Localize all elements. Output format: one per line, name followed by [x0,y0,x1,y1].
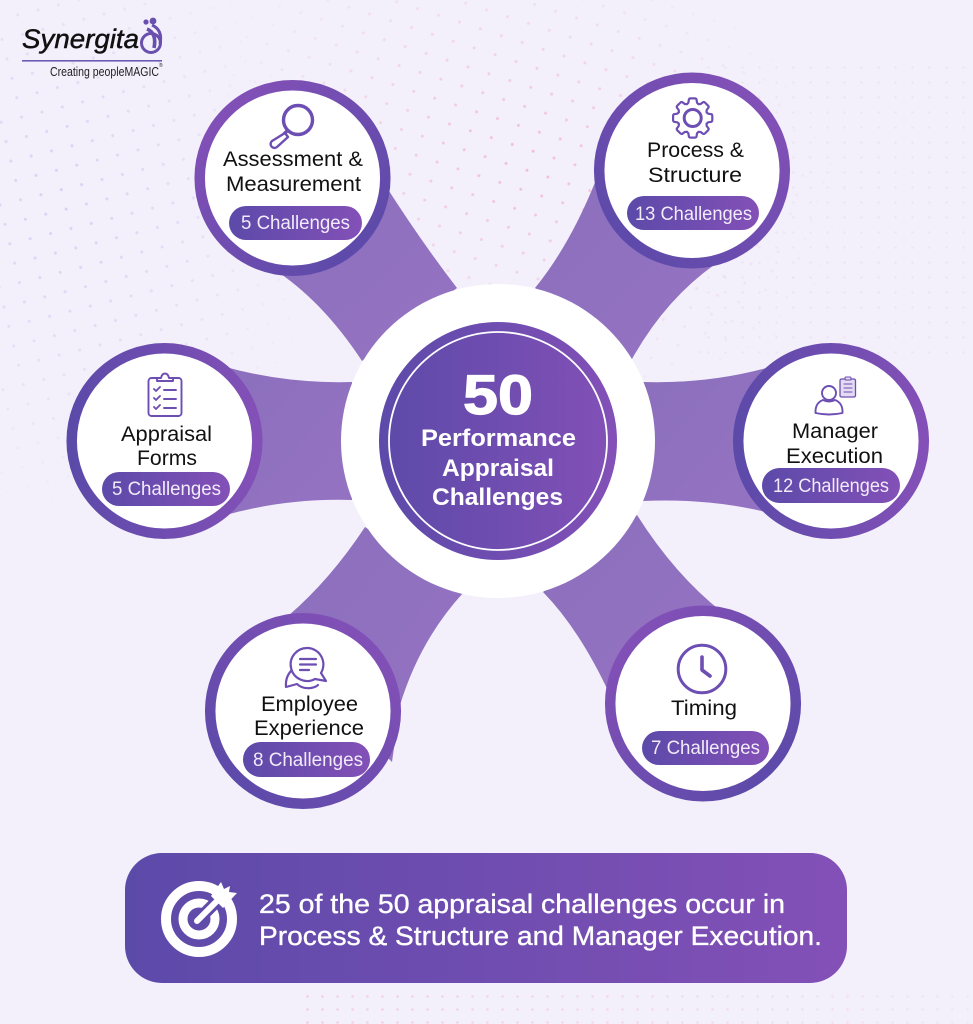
panel: Manager Execution: Execution [786,445,883,468]
panel: Employee Experience: Employee [261,693,358,716]
centre badge [379,322,617,560]
panel: Manager Execution: Manager [792,420,878,443]
panel: Manager Execution [738,348,924,534]
connector: employee experience to centre [288,527,463,762]
panel: Assessment & Measurement [200,85,385,271]
callout banner: Process & Structure and Manager Execution. [259,921,822,951]
panel: Employee Experience: Experience [254,717,364,740]
callout banner: 25 of the 50 appraisal challenges occur in [259,889,785,919]
connector: assessment to centre [272,180,457,361]
panel: Timing: Timing [671,697,737,720]
icon: target with arrow [166,882,237,952]
panel: Assessment & Measurement: 5 Challenges [241,213,350,234]
centre white ring [341,284,655,598]
centre badge: Performance [421,425,576,452]
panel: Process & Structure: Structure [648,164,742,187]
panel: Appraisal Forms: Forms [137,447,197,470]
icon: clipboard checklist [148,374,182,416]
panel: Employee Experience [210,618,396,804]
panel: Appraisal Forms: Appraisal [121,423,212,446]
connector: manager execution to centre [643,367,770,513]
icon: gear [673,98,712,138]
icon: manager with clipboard [815,377,856,414]
icon: clock [678,645,726,693]
centre badge: 50 [463,363,533,426]
callout banner [125,853,847,983]
panel: Appraisal Forms [72,348,257,534]
connector: timing to centre [543,515,722,695]
panel: Assessment & Measurement: Assessment & [223,148,363,171]
centre badge: Challenges [432,484,563,511]
panel: Timing [610,611,796,796]
icon: magnifying glass [271,106,312,148]
panel: Appraisal Forms: 5 Challenges [112,479,221,500]
logo: Synergita: ® [159,62,163,69]
icon: logo swirl [142,18,161,53]
logo: Synergita [22,18,163,79]
panel: Process & Structure: 13 Challenges [635,204,752,225]
connector: appraisal forms to centre [222,366,352,516]
centre badge: Appraisal [442,455,554,482]
icon: chat bubbles [286,648,326,688]
panel: Process & Structure [599,78,785,263]
connector: process to centre [535,180,714,359]
panel: Employee Experience: 8 Challenges [253,750,363,771]
logo: Synergita: Creating peopleMAGIC [50,65,159,79]
panel: Manager Execution: 12 Challenges [773,476,889,497]
panel: Assessment & Measurement: Measurement [226,173,361,196]
panel: Process & Structure: Process & [647,139,744,162]
panel: Timing: 7 Challenges [651,738,760,759]
logo: Synergita: Synergita [22,24,139,54]
